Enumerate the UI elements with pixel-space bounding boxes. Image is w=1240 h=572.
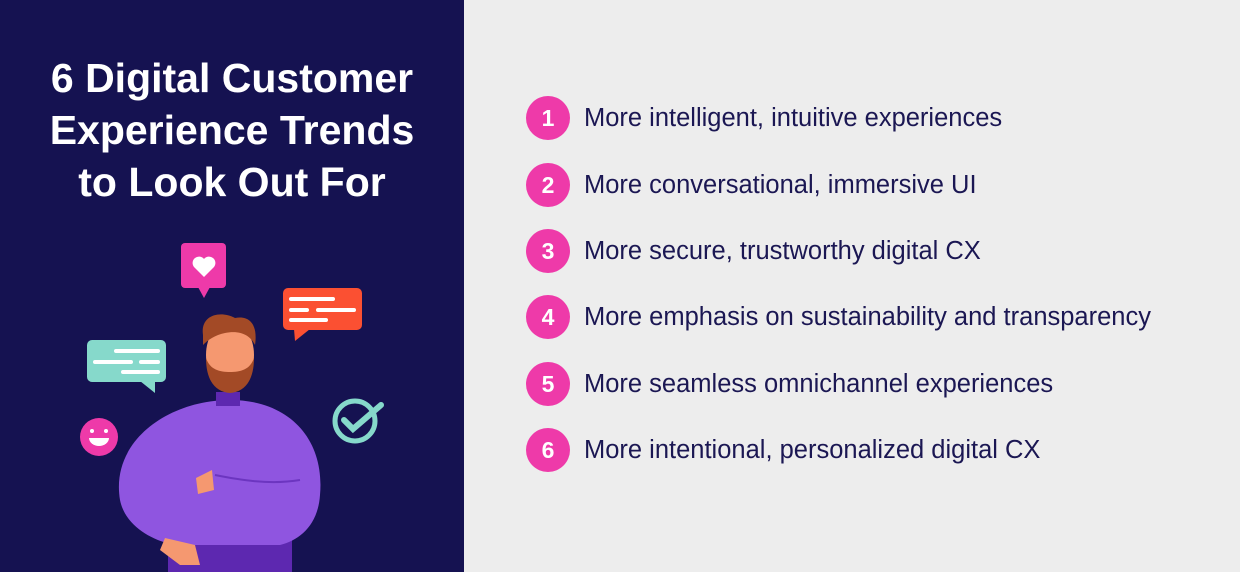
title: 6 Digital Customer [51, 55, 413, 101]
item 6: More intentional, personalized digital CX [584, 436, 1040, 464]
icon: check circle [335, 401, 381, 441]
item 4: 4 [542, 304, 554, 330]
item 2 [526, 163, 977, 207]
icon: teal bubble [87, 340, 166, 393]
item 5: More seamless omnichannel experiences [584, 370, 1053, 398]
item 3: More secure, trustworthy digital CX [584, 236, 981, 264]
illustration: man with speech bubbles [80, 243, 384, 572]
item 3 [526, 229, 981, 273]
item 4: More emphasis on sustainability and transparency [584, 302, 1151, 330]
item 1: 1 [542, 104, 554, 130]
item 2: 2 [542, 172, 554, 198]
item 5 [526, 362, 1053, 406]
icon: orange bubble [283, 288, 362, 341]
item 4 [526, 295, 1151, 339]
man [119, 314, 320, 572]
title [50, 55, 414, 205]
title: Experience Trends [50, 107, 414, 153]
panel: left [0, 0, 464, 572]
icon: heart bubble [181, 243, 226, 298]
item 6: 6 [542, 436, 554, 462]
icon: smiley [80, 418, 118, 456]
item 2: More conversational, immersive UI [584, 170, 977, 198]
item 1 [526, 96, 1002, 140]
title: to Look Out For [78, 159, 386, 205]
item 6 [526, 428, 1040, 472]
item 3: 3 [542, 238, 554, 264]
item 5: 5 [542, 370, 554, 396]
list: trends [526, 96, 1151, 472]
item 1: More intelligent, intuitive experiences [584, 104, 1002, 132]
